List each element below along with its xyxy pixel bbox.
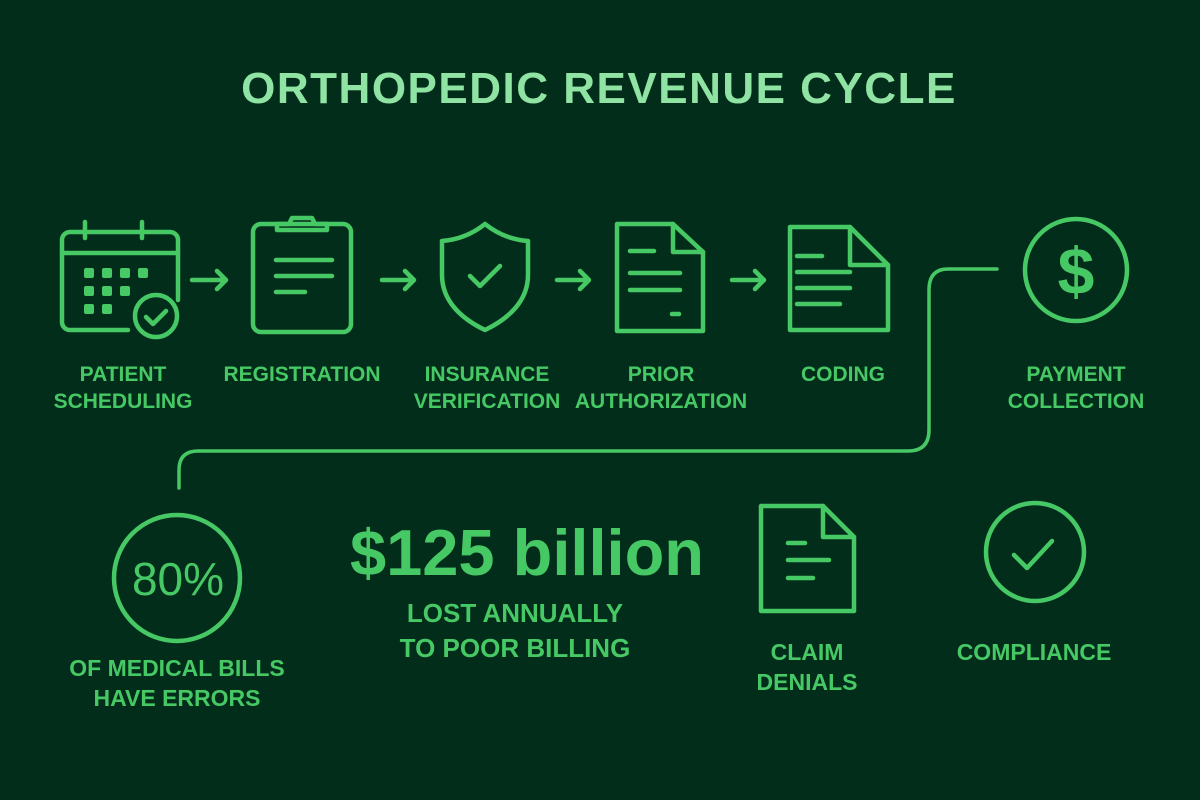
- stat 80%: 80%: [132, 553, 224, 605]
- icon: dollar circle: [1025, 219, 1127, 321]
- step labels: [54, 363, 1144, 413]
- stat labels: [69, 639, 1111, 711]
- step labels: PAYMENT: [1026, 363, 1126, 386]
- icon: calendar: [62, 222, 178, 337]
- connector line: [179, 269, 997, 488]
- step labels: PATIENT: [80, 363, 167, 386]
- stat labels: OF MEDICAL BILLS: [69, 655, 285, 681]
- icon: prior auth document: [617, 224, 703, 331]
- stat labels: DENIALS: [757, 669, 857, 695]
- dollar sign: $: [1058, 234, 1094, 308]
- icon: compliance check: [986, 503, 1084, 601]
- big stat caption: [400, 598, 630, 663]
- step labels: AUTHORIZATION: [575, 390, 747, 413]
- icon: clipboard: [253, 218, 351, 332]
- arrow 1: [192, 271, 226, 289]
- step labels: REGISTRATION: [223, 363, 381, 386]
- stat labels: CLAIM: [771, 639, 843, 665]
- step labels: VERIFICATION: [414, 390, 560, 413]
- stat labels: COMPLIANCE: [957, 639, 1111, 665]
- step labels: PRIOR: [628, 363, 694, 386]
- arrow 4: [732, 271, 764, 289]
- title: ORTHOPEDIC REVENUE CYCLE: [241, 64, 957, 113]
- icon: claim document: [761, 506, 854, 611]
- big stat caption: LOST ANNUALLY: [407, 598, 623, 628]
- step labels: CODING: [801, 363, 885, 386]
- arrow 3: [557, 271, 589, 289]
- stat labels: HAVE ERRORS: [94, 685, 260, 711]
- step labels: COLLECTION: [1008, 390, 1144, 413]
- icon: shield: [442, 224, 528, 330]
- icon: coding document: [790, 227, 888, 330]
- stat: 80% circle: [114, 515, 240, 641]
- arrow 2: [382, 271, 414, 289]
- big stat: $125 billion: [350, 516, 704, 589]
- step labels: SCHEDULING: [54, 390, 192, 413]
- big stat caption: TO POOR BILLING: [400, 633, 630, 663]
- step labels: INSURANCE: [425, 363, 549, 386]
